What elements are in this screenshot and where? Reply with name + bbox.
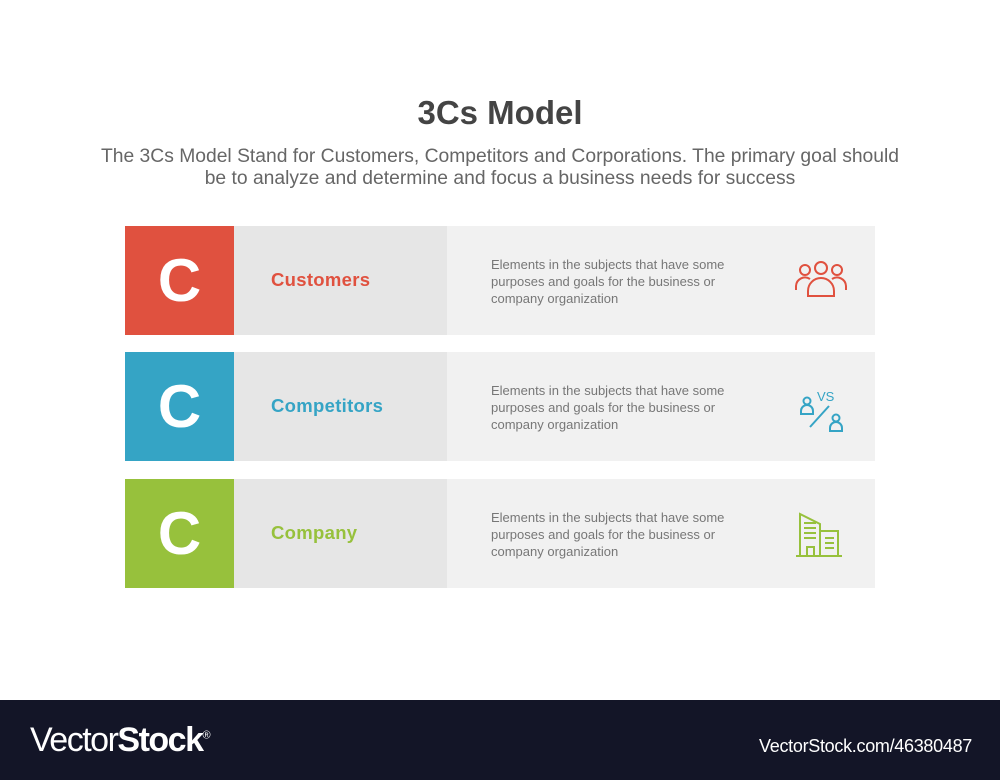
icon: versus [800,389,843,432]
icon: people [795,261,847,297]
label: Customers [271,269,370,290]
letter box [125,479,234,588]
icon: building [796,512,842,557]
letter box: C [158,373,201,440]
logo: VectorStock® [30,721,209,759]
subtitle: be to analyze and determine and focus a business needs for success [205,168,795,189]
title: 3Cs Model [417,94,583,131]
subtitle [101,146,899,189]
label [234,479,447,588]
row: company [125,479,875,588]
label [234,226,447,335]
url: VectorStock.com/46380487 [759,736,972,756]
letter box: C [158,247,201,314]
description: Elements in the subjects that have some purposes and goals for the business or company organization [491,383,724,432]
row: customers [125,226,875,335]
subtitle: The 3Cs Model Stand for Customers, Competitors and Corporations. The primary goal should [101,146,899,167]
footer bar [0,700,1000,780]
icon: versus: VS [817,389,835,404]
description: Elements in the subjects that have some purposes and goals for the business or company organization [491,257,724,306]
row: competitors [125,352,875,461]
letter box [125,226,234,335]
letter box: C [158,500,201,567]
letter box [125,352,234,461]
label: Competitors [271,395,383,416]
description: Elements in the subjects that have some purposes and goals for the business or company organization [491,510,724,559]
label [234,352,447,461]
label: Company [271,522,357,543]
